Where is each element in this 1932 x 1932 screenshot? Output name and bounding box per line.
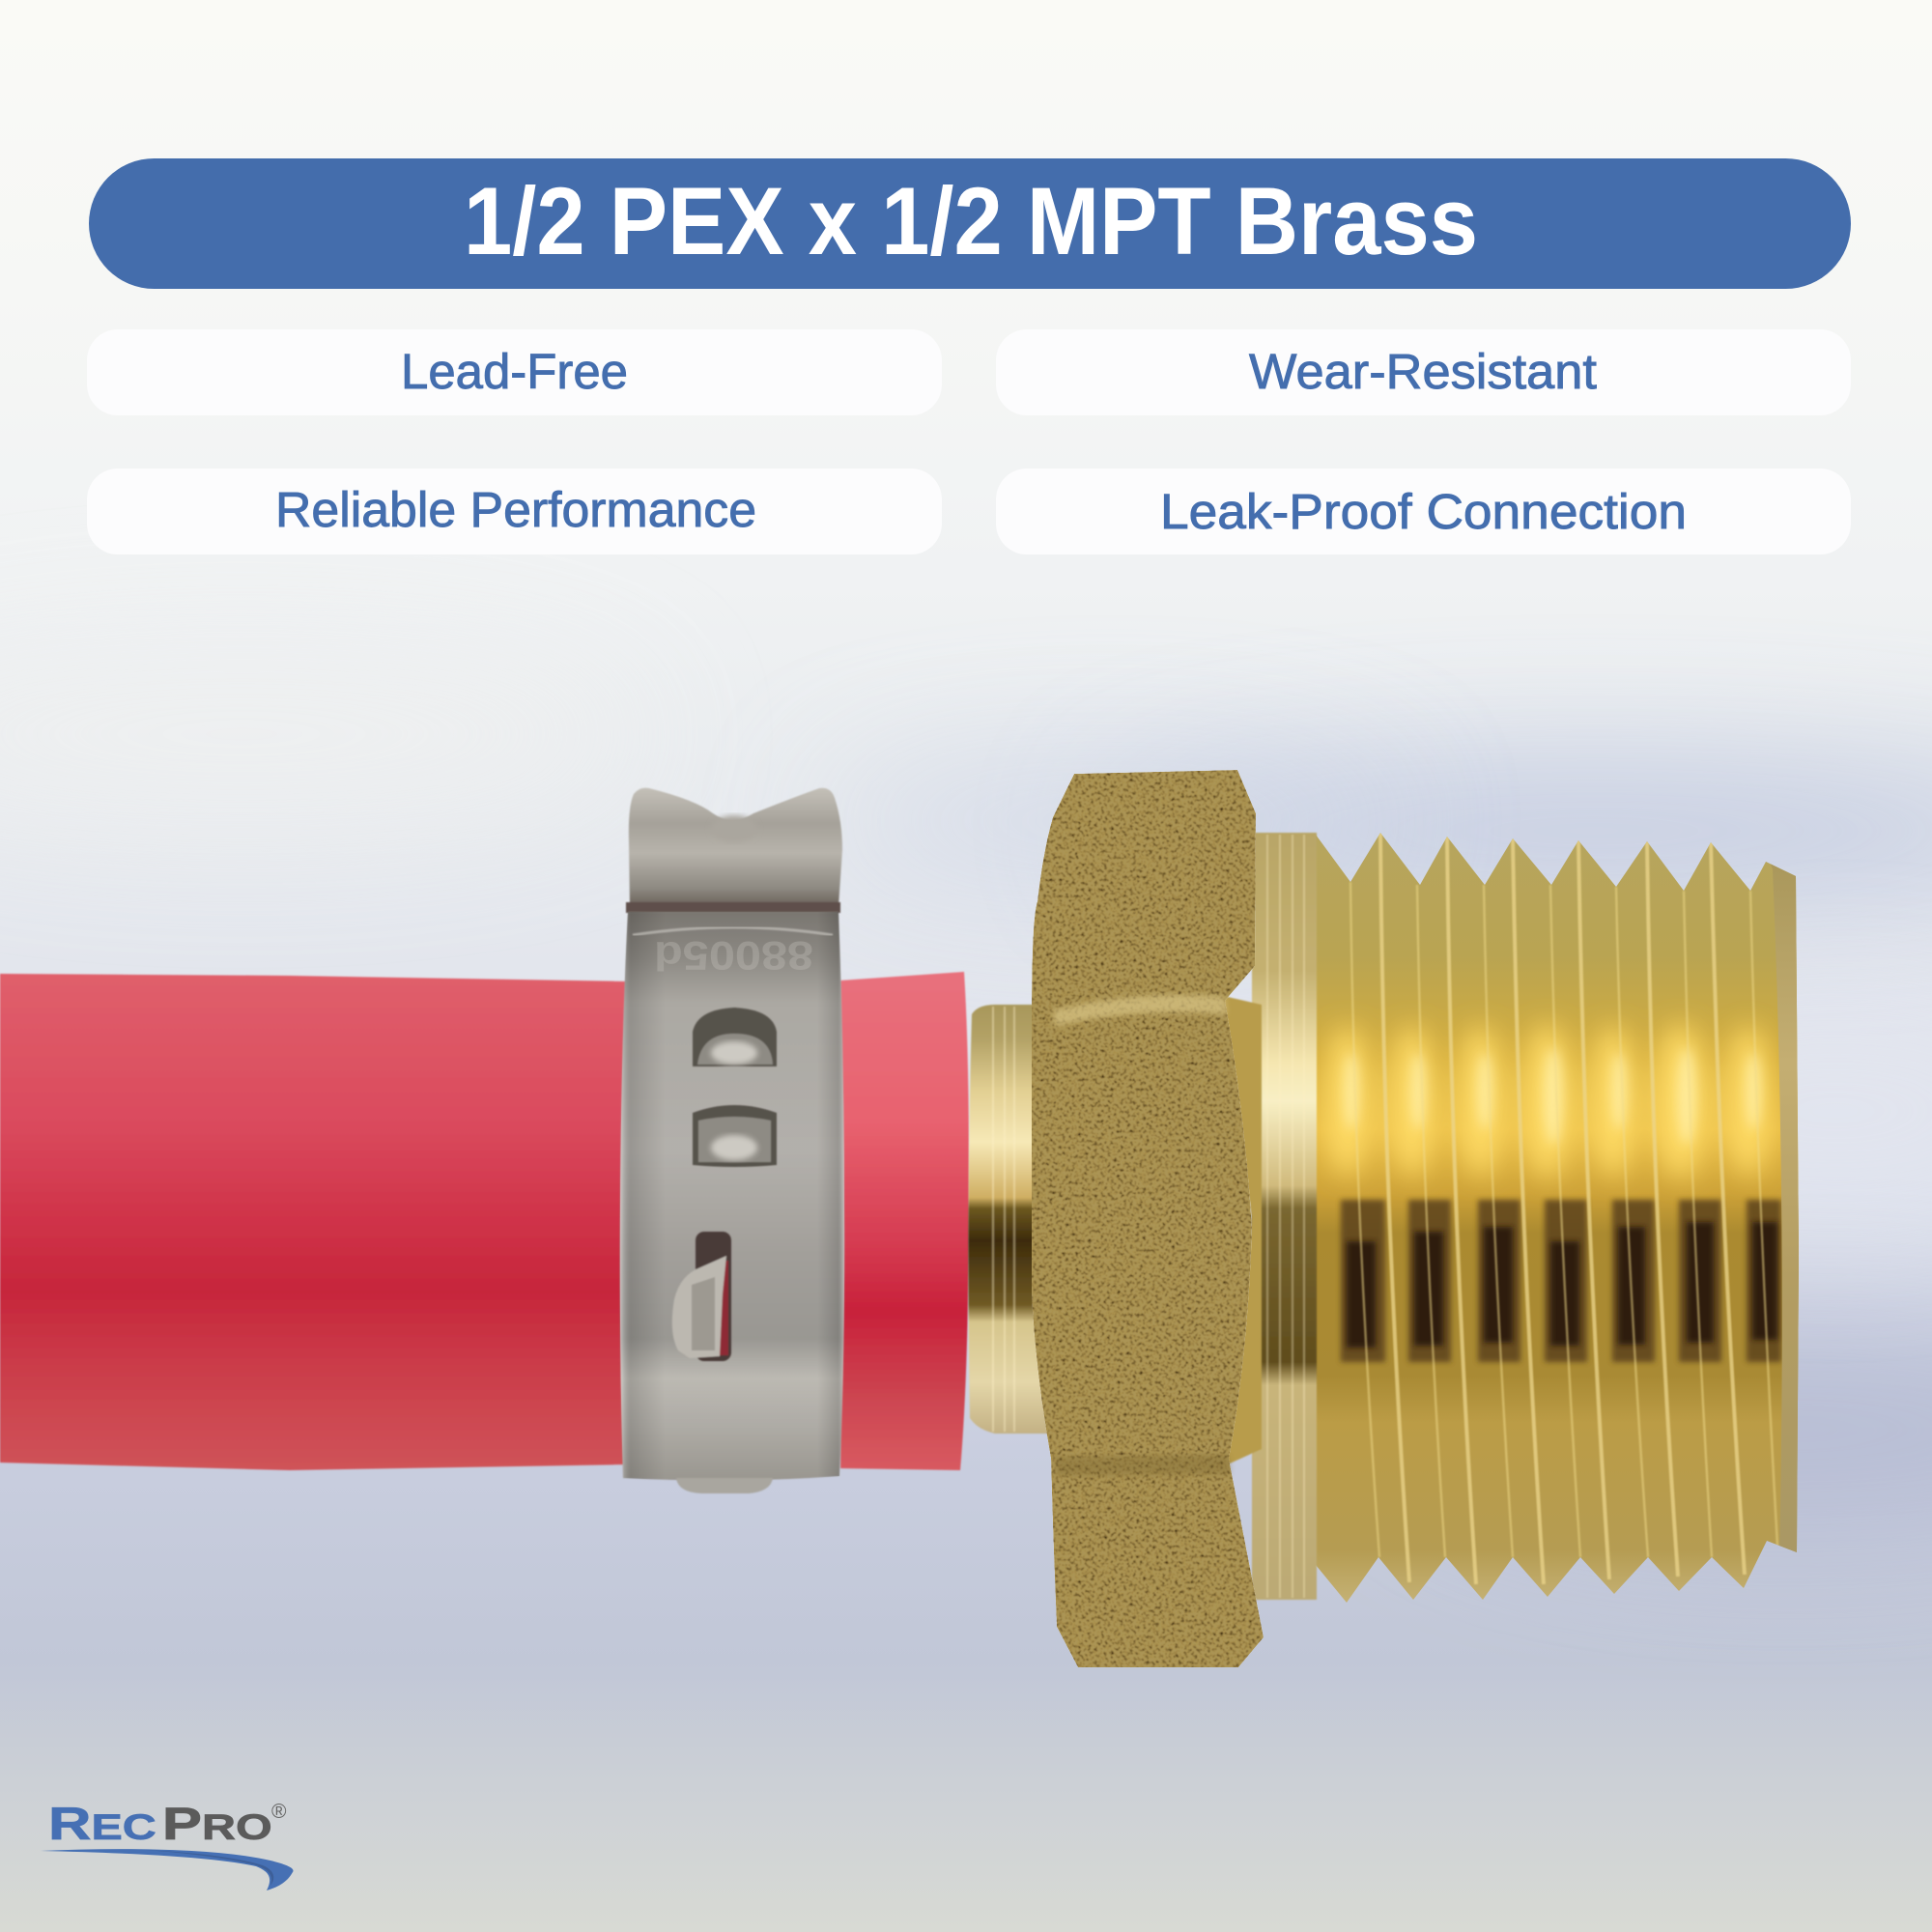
clamp band (620, 912, 844, 1481)
thread crest and root lines (1380, 833, 1745, 1584)
feature chip: Wear-Resistant (996, 329, 1851, 415)
logo: RecPro (41, 1798, 294, 1890)
clamp hole 2 (693, 1105, 777, 1167)
feature chip: Lead-Free (87, 329, 942, 415)
feature chip: Lead-Free: Lead-Free (401, 344, 628, 399)
logo wordmark: RO (202, 1807, 272, 1848)
feature chip: Reliable Performance (87, 469, 942, 554)
nut lower bevel shading (1055, 1455, 1231, 1476)
nut body with facets (1032, 770, 1264, 1667)
clamp gap line (626, 902, 840, 913)
feature chip: Wear-Resistant: Wear-Resistant (1249, 344, 1597, 399)
threaded shoulder (1252, 833, 1317, 1600)
logo wordmark: P (162, 1798, 202, 1849)
logo wordmark: REC (48, 1798, 156, 1849)
clamp hole 1 (693, 1008, 777, 1066)
title banner (89, 158, 1851, 289)
thread dark reflections (1341, 1200, 1781, 1362)
clamp ear dimple (711, 815, 757, 842)
clamp stamped marking: 88005d (654, 933, 813, 979)
product: PEX tube (0, 972, 969, 1470)
logo swoosh (41, 1849, 294, 1890)
nut top bevel highlight (1053, 995, 1227, 1026)
product: small brass collar (968, 1005, 1048, 1434)
feature chip: Leak-Proof Connection: Leak-Proof Connection (1160, 484, 1687, 539)
thread body (1309, 821, 1811, 1613)
logo registered mark: ® (271, 1801, 287, 1823)
thread highlights (1324, 1024, 1772, 1179)
logo wordmark (48, 1798, 272, 1849)
product: stainless clamp (620, 788, 844, 1493)
thread end chamfer (1766, 850, 1806, 1560)
clamp slot and tab (672, 1232, 731, 1361)
feature chip: Reliable Performance: Reliable Performance (275, 482, 756, 537)
clamp ear (629, 788, 842, 906)
title banner: 1/2 PEX x 1/2 MPT Brass (464, 167, 1478, 274)
clamp bottom nub (676, 1478, 773, 1493)
feature chip: Leak-Proof Connection (996, 469, 1851, 554)
nut side chamfer (1219, 995, 1262, 1468)
product: threaded brass section (1252, 821, 1811, 1613)
product: textured hex nut (1032, 770, 1264, 1667)
